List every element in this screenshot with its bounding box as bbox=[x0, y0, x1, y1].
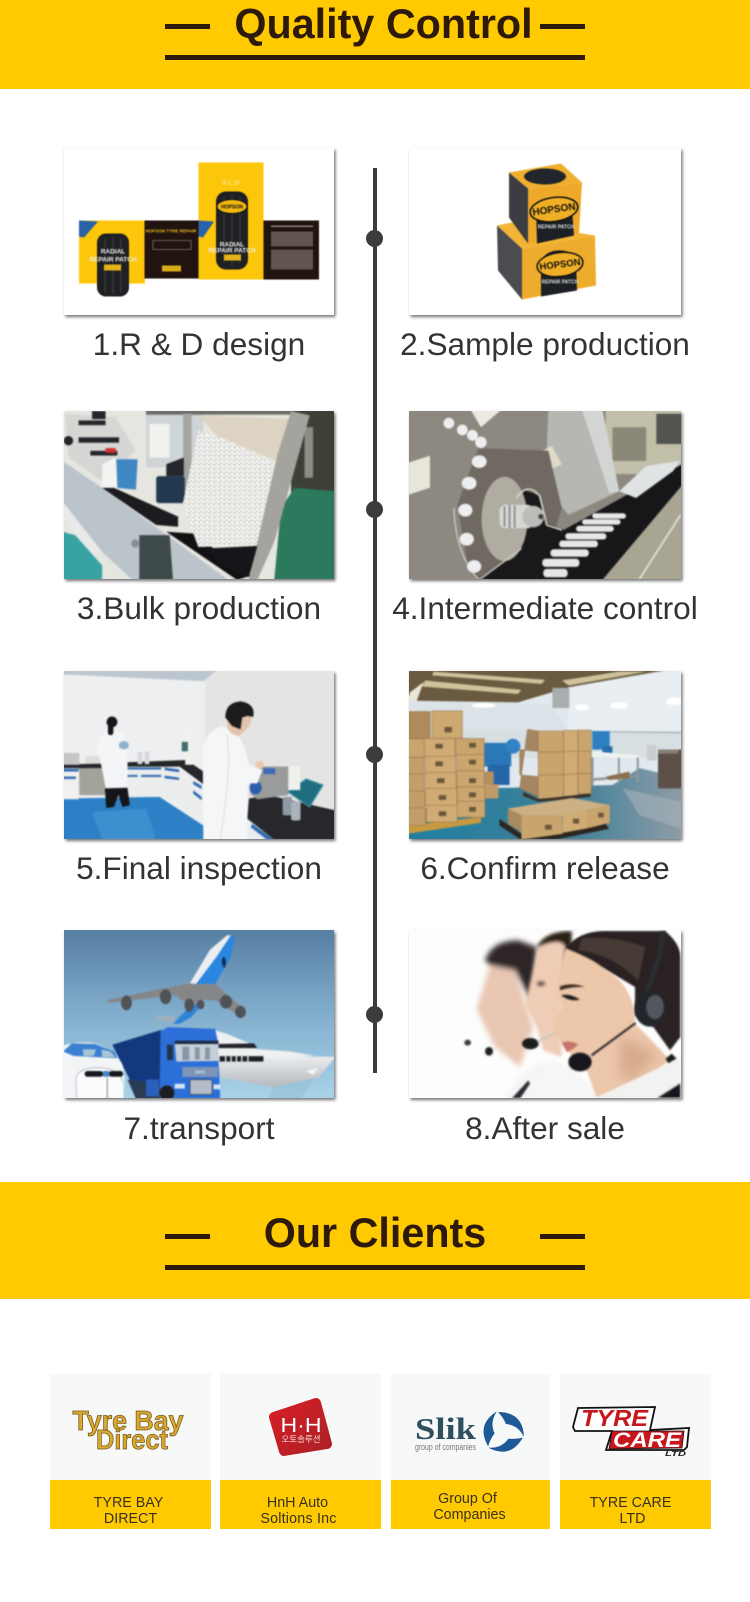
logo: Slik swirl bbox=[415, 1411, 524, 1452]
client card: Tyre Bay Direct bbox=[50, 1405, 211, 1529]
logo: Tyre Bay Direct bbox=[72, 1405, 184, 1455]
caption bbox=[220, 1480, 381, 1529]
caption: Companies bbox=[433, 1507, 506, 1523]
label 1: 1.R & D design bbox=[93, 326, 305, 362]
timeline node 4 bbox=[366, 1006, 383, 1023]
caption: DIRECT bbox=[104, 1511, 157, 1527]
label 4: 4.Intermediate control bbox=[392, 590, 698, 626]
caption bbox=[50, 1480, 211, 1529]
logo: Tyre Care bbox=[572, 1405, 690, 1458]
underline bbox=[165, 1265, 585, 1270]
photo 2: sample boxes: REPAIR PATCH bbox=[542, 280, 579, 286]
timeline node 1 bbox=[366, 230, 383, 247]
photo 5: lab inspection bbox=[64, 671, 334, 839]
heading: Our Clients bbox=[264, 1210, 486, 1256]
photo 1: packaging design: S-1 20 bbox=[222, 180, 240, 186]
logo: Tyre Care: TYRE bbox=[581, 1405, 649, 1431]
right dash bbox=[540, 1234, 585, 1239]
logo: Tyre Bay Direct: Direct bbox=[96, 1424, 168, 1455]
photo 1: packaging design: RADIAL bbox=[220, 242, 244, 248]
photo 6: warehouse release bbox=[409, 671, 681, 839]
photo 3: bulk production machine bbox=[64, 411, 334, 579]
caption: TYRE CARE bbox=[590, 1495, 671, 1511]
logo: HnH red badge: 오토솔루션 bbox=[281, 1434, 321, 1444]
timeline node 3 bbox=[366, 746, 383, 763]
photo 7: transport bbox=[64, 930, 334, 1098]
right dash bbox=[540, 24, 585, 29]
photo 2: sample boxes bbox=[409, 148, 681, 315]
left dash bbox=[165, 24, 210, 29]
logo: HnH red badge: H·H bbox=[280, 1415, 322, 1437]
timeline vertical line bbox=[373, 168, 377, 1073]
logo tile bbox=[220, 1374, 381, 1480]
client card: Tyre Care bbox=[560, 1405, 711, 1529]
photo 1: packaging design: HOPSON TYRE REPAIR bbox=[146, 228, 197, 234]
photo 1: packaging design: REPAIR PATCH bbox=[89, 256, 137, 264]
logo: Slik swirl: group of companies bbox=[415, 1442, 476, 1452]
photo 1: packaging design: RADIAL bbox=[101, 248, 125, 256]
left dash bbox=[165, 1234, 210, 1239]
caption: HnH Auto bbox=[267, 1495, 328, 1511]
caption: LTD bbox=[620, 1511, 645, 1527]
photo 1: packaging design bbox=[64, 148, 334, 315]
photo 7: transport: SHS bbox=[195, 1069, 205, 1075]
logo: Tyre Care: CARE bbox=[613, 1429, 682, 1452]
caption bbox=[391, 1480, 550, 1529]
logo: Slik swirl: Slik bbox=[415, 1411, 477, 1446]
photo 8: after-sale call centre bbox=[409, 930, 681, 1098]
caption bbox=[560, 1480, 711, 1529]
timeline bbox=[366, 168, 383, 1073]
label 7: 7.transport bbox=[123, 1110, 275, 1146]
photo 2: sample boxes: HOPSON bbox=[532, 202, 576, 218]
logo: Tyre Bay Direct: Tyre Bay bbox=[72, 1405, 184, 1436]
photo 4: intermediate control machine bbox=[409, 411, 681, 579]
header band: Quality Control bbox=[0, 0, 750, 89]
underline bbox=[165, 55, 585, 60]
logo tile bbox=[560, 1374, 711, 1480]
label 8: 8.After sale bbox=[465, 1110, 625, 1146]
heading: Quality Control bbox=[234, 1, 533, 47]
header band: Our Clients bbox=[0, 1182, 750, 1299]
photo 2: sample boxes: REPAIR PATCH bbox=[538, 224, 575, 230]
photo 2: sample boxes: HOPSON bbox=[539, 257, 581, 273]
caption: TYRE BAY bbox=[94, 1495, 163, 1511]
photo 1: packaging design: REPAIR PATCH bbox=[208, 248, 256, 254]
logo: Tyre Care: LTD bbox=[665, 1451, 686, 1458]
timeline node 2 bbox=[366, 501, 383, 518]
label 3: 3.Bulk production bbox=[77, 590, 321, 626]
logo tile bbox=[391, 1374, 550, 1480]
logo: HnH red badge bbox=[269, 1398, 332, 1456]
client card: HnH Auto bbox=[220, 1398, 381, 1529]
caption: Soltions Inc bbox=[260, 1511, 337, 1527]
label 2: 2.Sample production bbox=[400, 326, 690, 362]
client card: Slik group of companies bbox=[391, 1411, 550, 1529]
label 6: 6.Confirm release bbox=[420, 850, 670, 886]
logo tile bbox=[50, 1374, 211, 1480]
photo 1: packaging design: HOPSON bbox=[221, 204, 243, 210]
caption: Group Of bbox=[438, 1491, 497, 1507]
label 5: 5.Final inspection bbox=[76, 850, 322, 886]
